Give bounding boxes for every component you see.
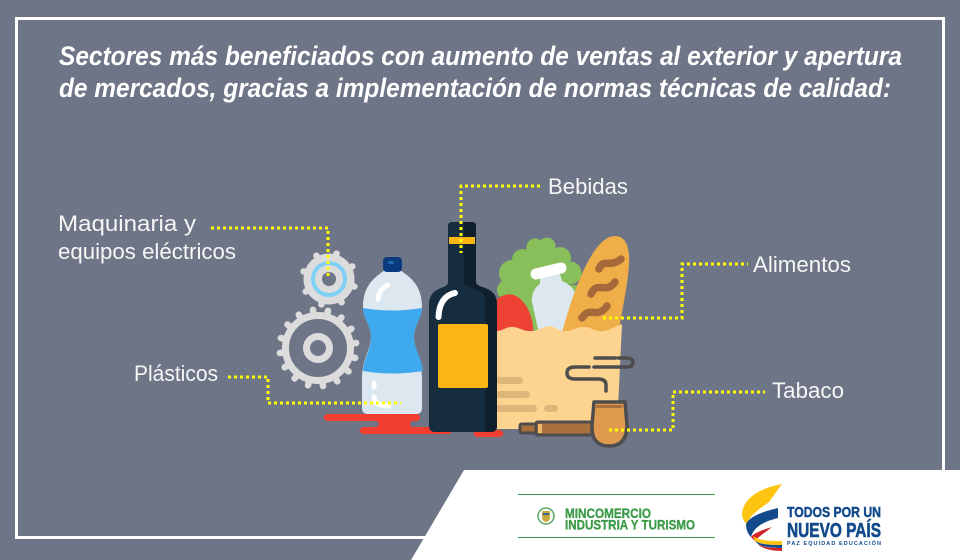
logo: Mincomercio <box>518 494 715 538</box>
sector labels <box>58 174 851 403</box>
bag body <box>496 324 622 429</box>
lettuce <box>497 238 582 330</box>
title <box>59 41 902 103</box>
logo: Todos por un nuevo país: NUEVO PAÍS <box>787 519 881 542</box>
icon: gears (maquinaria) <box>280 254 356 386</box>
milk bottle <box>532 274 576 334</box>
icon: red puddle <box>324 414 504 437</box>
baguette <box>562 236 629 333</box>
logo: Todos por un nuevo país: TODOS POR UN <box>787 504 881 521</box>
logo: Todos por un nuevo país: PAZ EQUIDAD EDUCACIÓN <box>787 539 881 547</box>
icon: wine bottle <box>429 222 497 432</box>
icon: tobacco pipe and smoke <box>520 358 633 446</box>
footer panel <box>411 470 960 560</box>
sector labels: Maquinaria y <box>58 211 196 236</box>
sector labels: Bebidas <box>548 174 628 199</box>
sector labels: Plásticos <box>134 361 218 386</box>
logo: Mincomercio: MINCOMERCIO <box>565 506 651 521</box>
leader lines <box>211 186 765 430</box>
sector labels: equipos eléctricos <box>58 239 236 264</box>
icon: plastic bottle <box>362 257 423 414</box>
sector labels: Tabaco <box>772 378 844 403</box>
sector labels: Alimentos <box>753 252 851 277</box>
icon: paper bag with food <box>496 236 629 429</box>
logo: Todos por un nuevo país <box>742 484 881 551</box>
title: de mercados, gracias a implementación de normas técnicas de calidad: <box>59 73 891 103</box>
logo: Mincomercio: INDUSTRIA Y TURISMO <box>565 518 695 532</box>
tomato <box>496 294 533 335</box>
